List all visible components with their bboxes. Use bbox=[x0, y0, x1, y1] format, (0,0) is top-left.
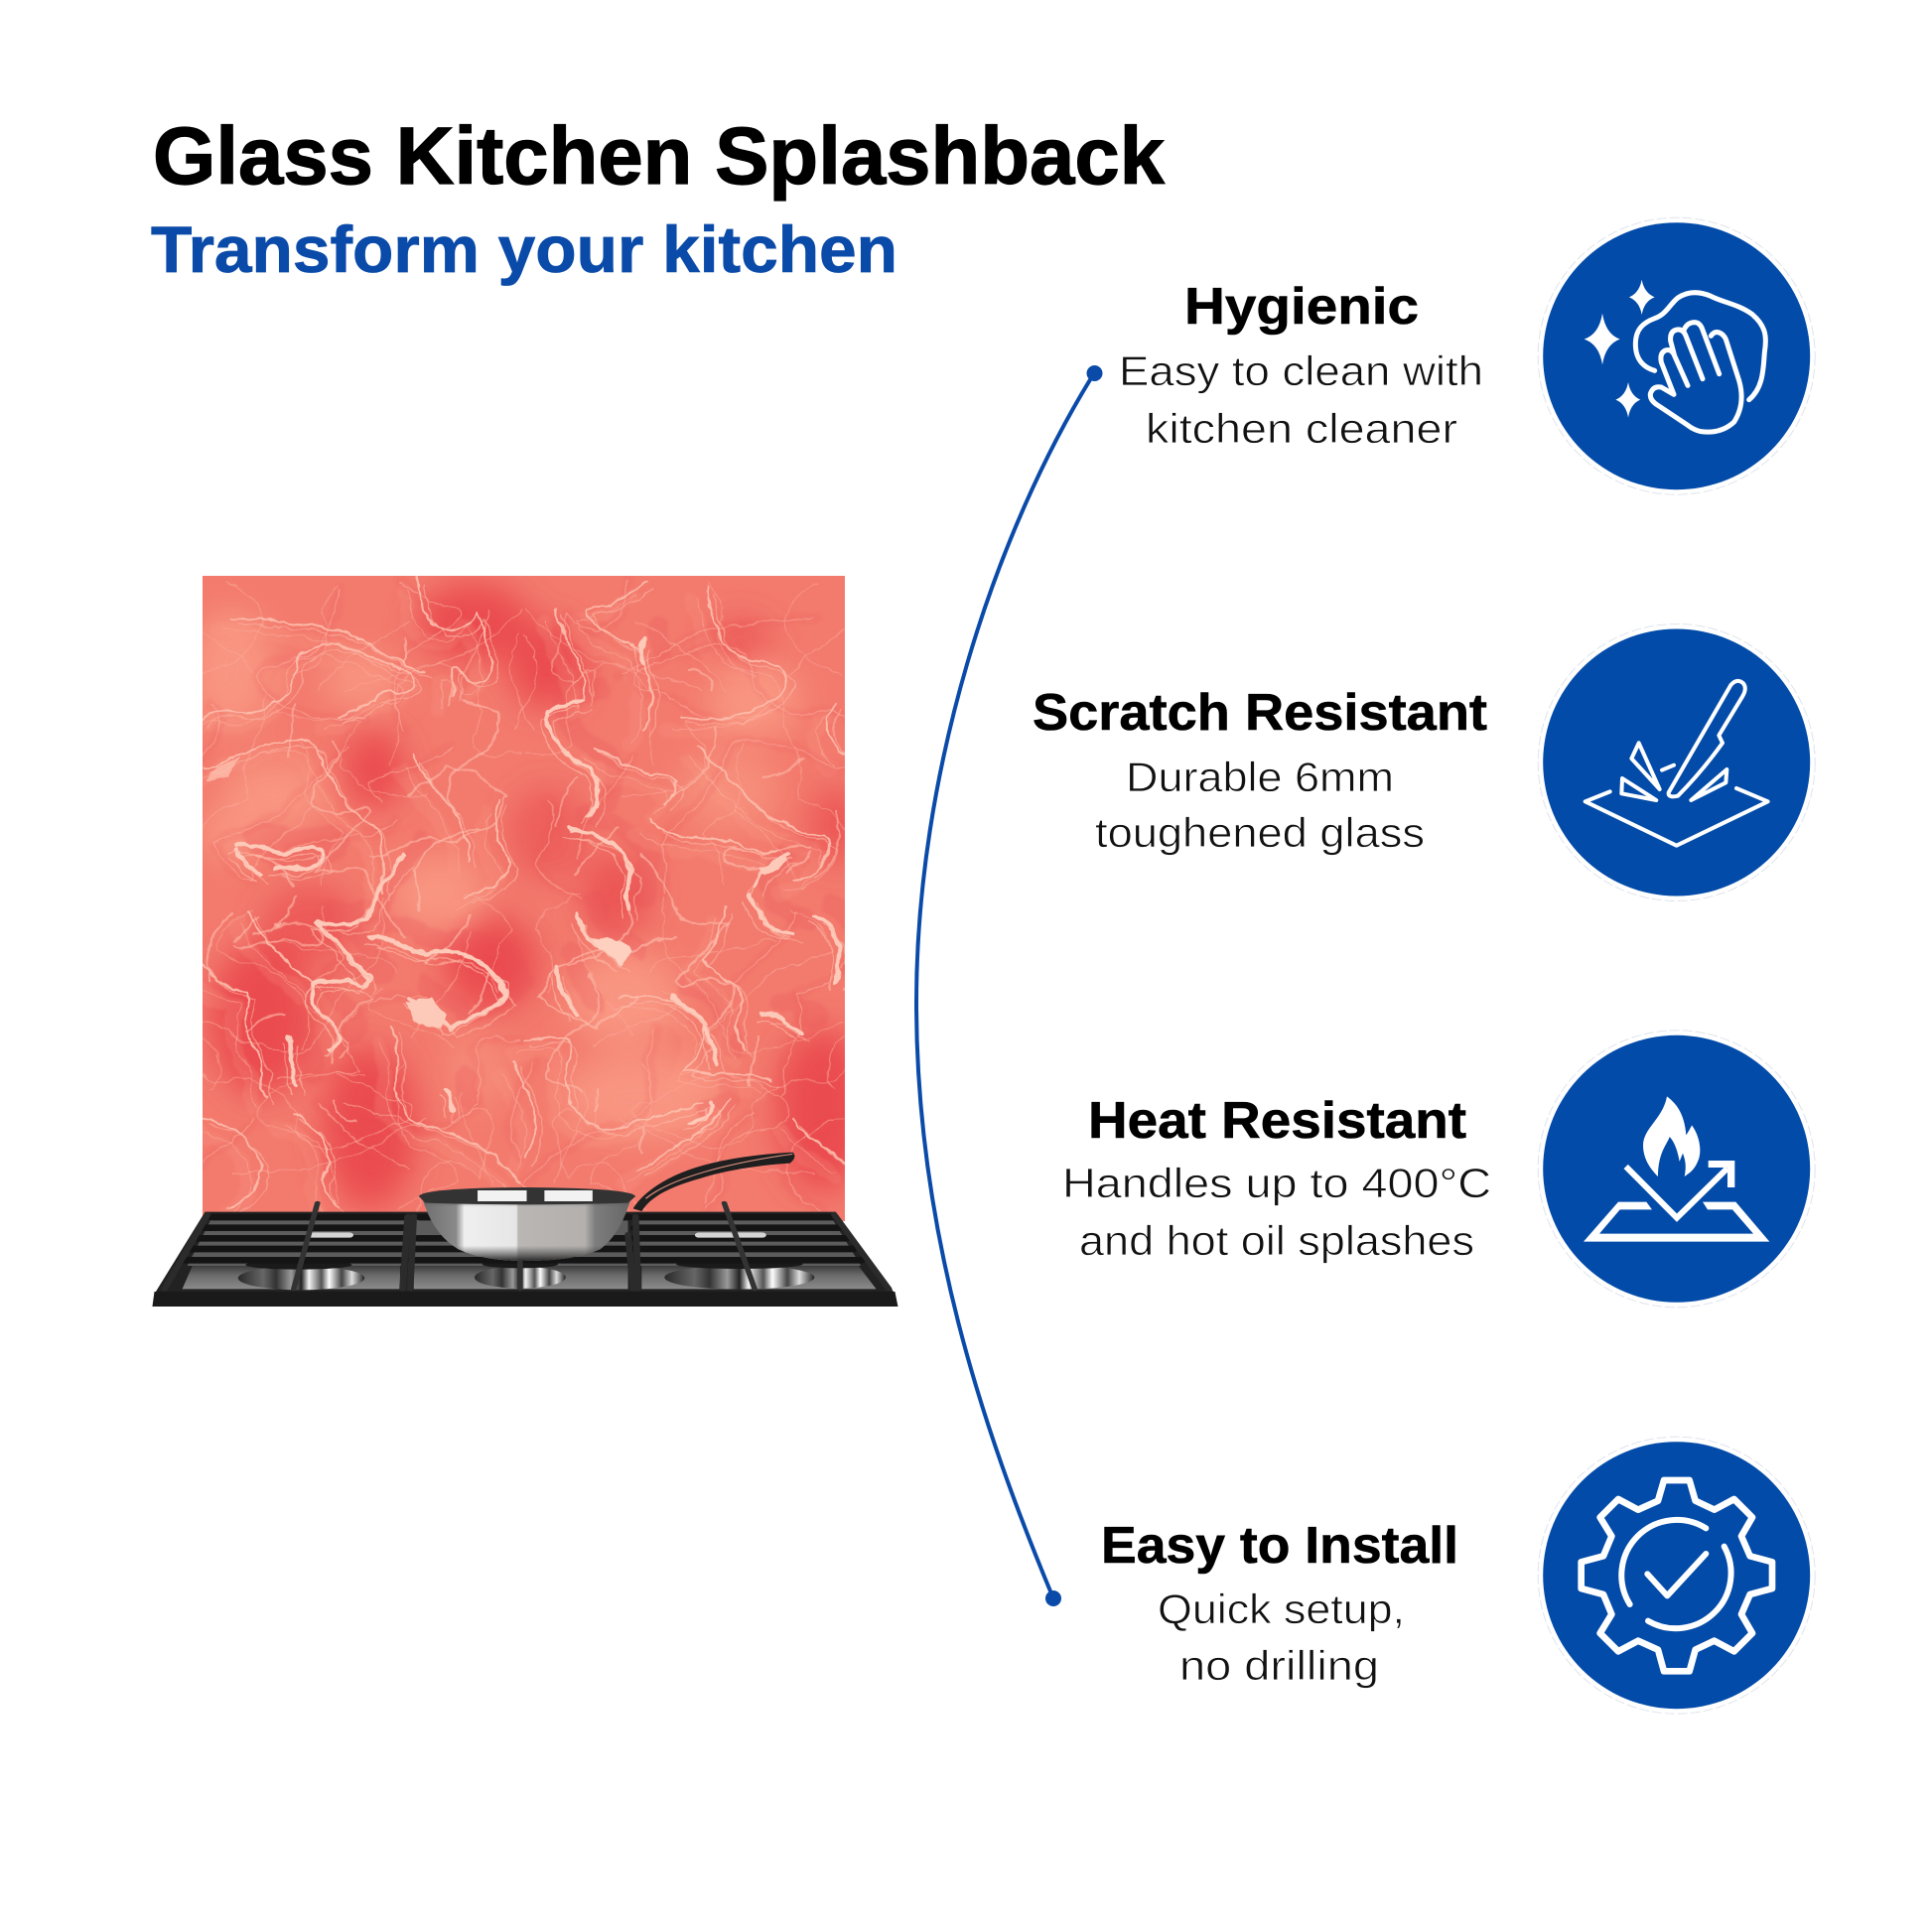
frying pan bbox=[419, 1153, 794, 1261]
icon: flame with deflecting arrow bbox=[1538, 1031, 1815, 1308]
subtitle: Transform your kitchen bbox=[151, 212, 897, 286]
stove bar gaps bbox=[188, 1216, 861, 1266]
feature: easy to install text bbox=[1101, 1517, 1458, 1689]
feature: heat resistant text bbox=[1062, 1092, 1491, 1264]
grates bbox=[165, 1203, 889, 1289]
stove body bbox=[156, 1212, 894, 1293]
feature: hygienic text bbox=[1119, 278, 1483, 452]
feature: heat resistant text: and hot oil splashes bbox=[1079, 1217, 1474, 1264]
title: Glass Kitchen Splashback bbox=[153, 111, 1165, 202]
icon: hand wiping with sparkles bbox=[1538, 217, 1815, 494]
feature: heat resistant text: Heat Resistant bbox=[1088, 1092, 1466, 1150]
front edge bbox=[152, 1292, 897, 1307]
feature: easy to install text: Quick setup, bbox=[1158, 1586, 1405, 1632]
connector arc with end dots bbox=[916, 365, 1102, 1606]
panel: coral marble glass splashback bbox=[189, 576, 871, 1222]
feature: scratch resistant text: Durable 6mm bbox=[1126, 754, 1394, 800]
feature: hygienic text: Hygienic bbox=[1184, 278, 1419, 336]
icon: gear with check mark bbox=[1538, 1437, 1815, 1714]
feature: scratch resistant text: Scratch Resistant bbox=[1033, 684, 1487, 742]
feature: scratch resistant text: toughened glass bbox=[1095, 809, 1425, 856]
burners bbox=[238, 1260, 814, 1290]
feature: hygienic text: kitchen cleaner bbox=[1146, 405, 1457, 452]
feature: easy to install text: Easy to Install bbox=[1101, 1517, 1458, 1575]
feature: heat resistant text: Handles up to 400°C bbox=[1062, 1160, 1491, 1206]
feature: hygienic text: Easy to clean with bbox=[1119, 347, 1483, 394]
cooktop with burners and frying pan bbox=[152, 1153, 897, 1307]
feature: easy to install text: no drilling bbox=[1179, 1642, 1379, 1689]
icon: knife scratching glass bbox=[1538, 623, 1815, 901]
feature: scratch resistant text bbox=[1033, 684, 1487, 856]
stove floor panels bbox=[183, 1266, 877, 1289]
